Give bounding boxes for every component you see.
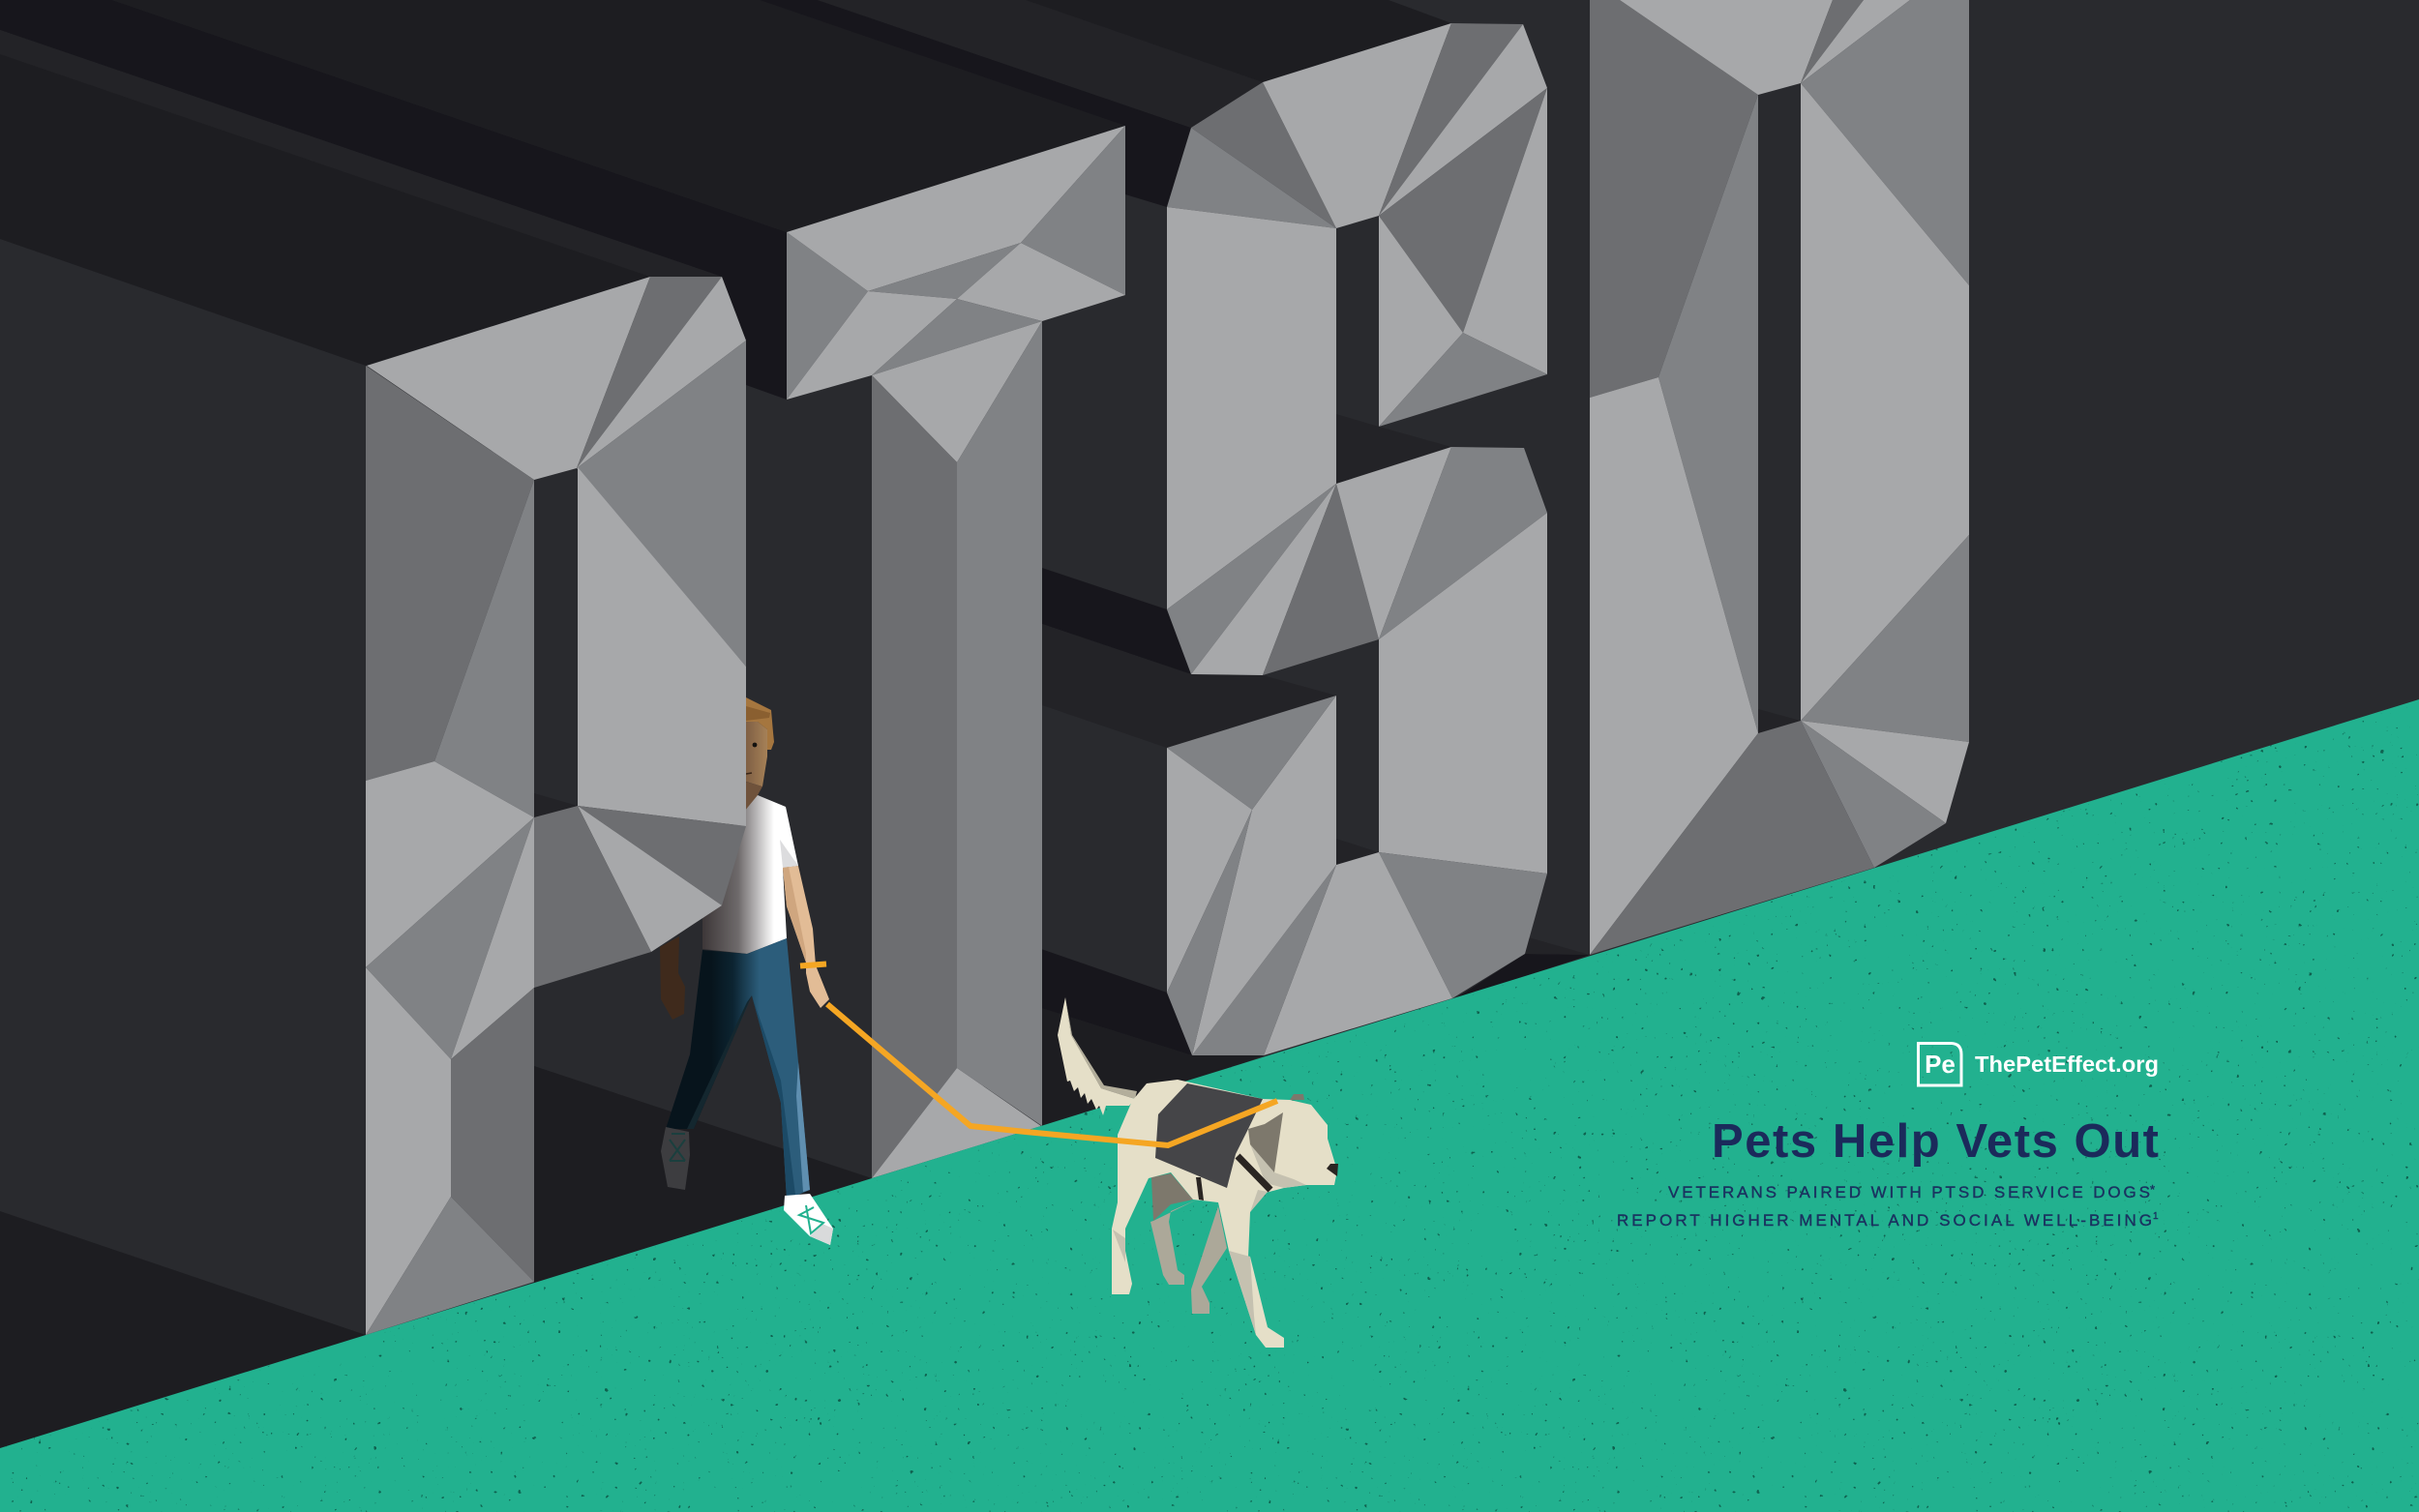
near front leg [1229,1251,1284,1348]
subtitle [1617,1182,2159,1230]
toe cap [810,1224,833,1245]
left hand [660,936,685,1020]
subtitle: REPORT HIGHER MENTAL AND SOCIAL WELL-BEING [1617,1211,2152,1230]
subtitle: 1 [2153,1211,2159,1222]
pants highlight [796,1062,810,1192]
logo Pe: Pe [1925,1050,1956,1079]
body [1112,1080,1337,1294]
nose [1327,1164,1338,1176]
neck shadow [1250,1144,1306,1188]
back shoe [661,1127,690,1190]
sleeve shade [780,840,798,868]
face [735,722,767,786]
vest straps [1238,1156,1270,1190]
tail [1058,997,1135,1115]
pants [666,938,810,1200]
far front leg [1191,1206,1227,1314]
letter D [1590,0,1969,955]
tail shade [1065,997,1137,1099]
under neck [1250,1190,1268,1212]
shirt [702,795,798,954]
hair [735,693,774,750]
pants dark panel [752,995,795,1200]
front shoe laces [799,1205,823,1233]
website: ThePetEffect.org [1975,1052,2159,1077]
title: Pets Help Vets Out [1712,1115,2159,1168]
logo box [1918,1043,1961,1085]
3D extrusion shadows behind the letters [0,0,1801,1451]
orange leash [827,1004,1277,1145]
front shoe [784,1194,833,1245]
near hind leg shade [1113,1230,1125,1262]
letter S [1167,23,1547,1055]
back leg edge [687,995,752,1129]
logo [1918,1043,2159,1085]
green ground [0,699,2419,1512]
ear [1248,1112,1283,1172]
far ear [1290,1094,1304,1100]
letter P [366,277,746,1335]
eye [753,743,757,747]
subtitle: VETERANS PAIRED WITH PTSD SERVICE DOGS [1668,1183,2150,1201]
back shoe laces [670,1134,685,1161]
man walking [660,693,833,1245]
vest [1155,1083,1263,1188]
service dog [1058,997,1338,1348]
bracelet [800,964,826,965]
subtitle: * [2150,1182,2155,1197]
mouth [746,773,752,774]
arm shade [783,867,806,963]
hair highlight [746,706,770,721]
letter T [787,126,1125,1178]
arm [783,866,829,1008]
neck [735,779,762,822]
far back leg [1150,1200,1197,1285]
